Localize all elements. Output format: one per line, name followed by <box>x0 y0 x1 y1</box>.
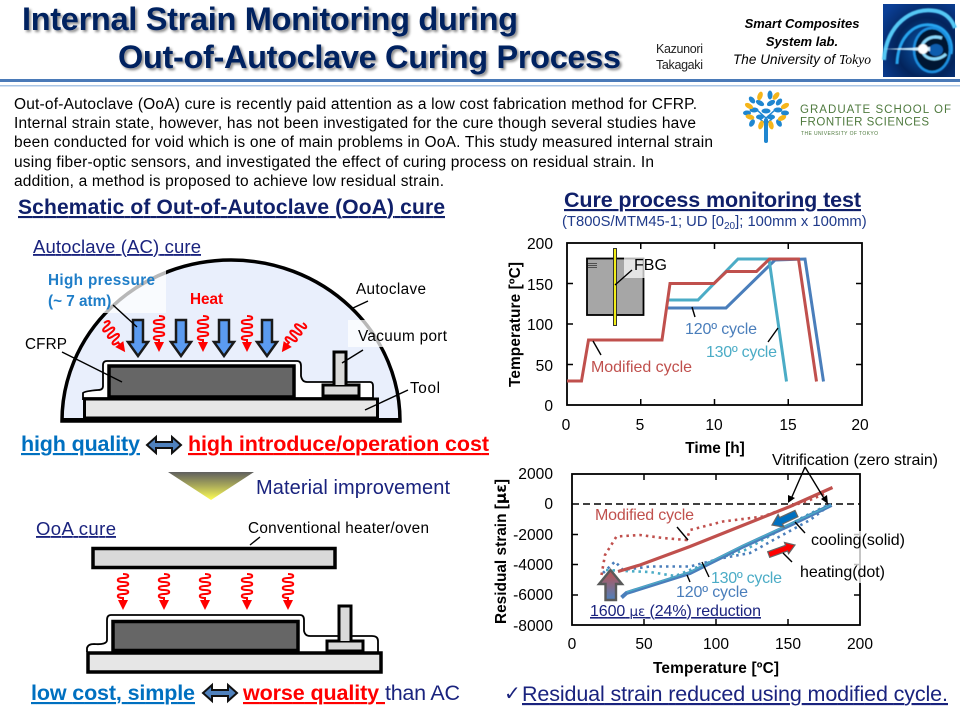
intro text <box>14 96 713 190</box>
lab name <box>733 16 871 67</box>
vacuum bag <box>87 615 378 652</box>
tick labels: 0 <box>544 496 553 513</box>
tick labels <box>527 236 869 434</box>
series labels: Modified cycle <box>591 359 692 376</box>
CFRP laminate <box>113 622 298 650</box>
tick labels: 200 <box>847 636 873 653</box>
heading: cure process monitoring test: ]; 100mm x 100mm) <box>735 214 867 230</box>
comparison: OoA <box>31 681 460 705</box>
chart annotations: 1600 με (24%) reduction <box>590 603 761 620</box>
tick labels: -8000 <box>513 618 553 635</box>
tick labels: 150 <box>527 277 553 294</box>
icon: lab swirl logo <box>883 4 955 77</box>
graduate school name: THE UNIVERSITY OF TOKYO <box>801 131 878 137</box>
tick labels <box>513 466 873 653</box>
author: Kazunori <box>656 42 703 56</box>
chart annotations: Modified cycle <box>595 507 694 524</box>
comparison: OoA: low cost, simple <box>31 681 195 705</box>
graduate school name: FRONTIER SCIENCES <box>800 116 929 128</box>
OoA label: OoA cure <box>36 518 116 539</box>
tick labels: -4000 <box>513 557 553 574</box>
axis titles <box>507 262 745 457</box>
chart annotations <box>590 452 938 620</box>
series: 120 cycle <box>668 259 824 382</box>
series: 130 cycle <box>668 259 786 382</box>
series labels <box>591 321 777 376</box>
icon: graduate school tree logo <box>743 90 790 143</box>
lab name: Smart Composites <box>745 16 859 31</box>
lab name: System lab. <box>766 34 838 49</box>
tick labels: 2000 <box>518 466 553 483</box>
diagram labels <box>25 272 448 397</box>
panel: autoclave cure <box>25 236 457 422</box>
tick labels: 0 <box>544 398 553 415</box>
axes <box>567 243 862 405</box>
tick labels: 5 <box>636 417 645 434</box>
chart annotations: 130º cycle <box>711 570 782 587</box>
panel: OoA cure <box>36 518 429 672</box>
vacuum port <box>327 606 363 651</box>
heading: cure process monitoring test: (T800S/MTM45-1; UD [0 <box>562 214 724 230</box>
tick labels: -6000 <box>513 587 553 604</box>
graduate school name <box>800 104 951 137</box>
heater <box>93 520 429 568</box>
diagram labels: Autoclave <box>356 281 426 298</box>
tick labels: 20 <box>851 417 869 434</box>
comparison: autoclave <box>21 432 489 456</box>
diagram labels: CFRP <box>25 336 67 353</box>
axes <box>572 474 860 625</box>
header rules <box>0 79 960 86</box>
arrow: heating <box>767 539 797 560</box>
autoclave dome <box>62 260 400 421</box>
author <box>656 42 703 72</box>
leader lines <box>62 301 408 410</box>
comparison: OoA: than AC <box>385 681 460 705</box>
axis titles: Temperature [ºC] <box>507 262 524 387</box>
tick labels: 10 <box>705 417 723 434</box>
chart: cure temperature cycles <box>507 236 869 457</box>
axis titles: Residual strain [με] <box>492 479 510 624</box>
title <box>22 1 621 75</box>
axis titles: Time [h] <box>685 440 745 457</box>
diagram labels: Vacuum port <box>358 328 448 345</box>
comparison: autoclave: high quality <box>21 432 140 456</box>
inset: FBG specimen <box>587 248 675 326</box>
diagram labels: Tool <box>410 380 440 397</box>
diagram labels: High pressure <box>48 272 155 289</box>
series: modified cycle <box>567 259 816 382</box>
tool plate <box>88 653 381 672</box>
diagram labels: (~ 7 atm) <box>48 293 111 310</box>
dotted heating curves <box>602 493 830 576</box>
arrow: cooling <box>769 507 799 531</box>
heater: Conventional heater/oven <box>248 520 429 537</box>
label background: cooling and heating <box>838 531 906 583</box>
chart annotations: heating(dot) <box>800 564 885 581</box>
series leaders <box>593 307 778 355</box>
arrows: vitrification <box>788 467 828 504</box>
title: Internal Strain Monitoring during <box>22 1 518 37</box>
graduate school name: GRADUATE SCHOOL OF <box>800 104 951 116</box>
tool plate <box>62 399 400 422</box>
arrow: material improvement <box>168 472 450 500</box>
diagram labels: Heat <box>190 291 223 308</box>
intro text: using fiber-optic sensors, and investigated the effect of curing process on residual strain. In <box>14 154 654 171</box>
title: Out-of-Autoclave Curing Process <box>118 39 621 75</box>
pressure arrows <box>128 320 277 356</box>
tick labels: 15 <box>779 417 797 434</box>
intro text: Internal strain state, however, has not been investigated for the cure though several studies have <box>14 115 696 132</box>
tick labels: -2000 <box>513 527 553 544</box>
tick labels: 200 <box>527 236 553 253</box>
heading: cure process monitoring test: 20 <box>724 221 736 232</box>
series labels: 120º cycle <box>685 321 757 338</box>
inset: FBG specimen: FBG <box>634 257 667 274</box>
arrow: reduction <box>599 570 622 600</box>
axis titles: Temperature [ºC] <box>653 660 779 677</box>
tick labels: 150 <box>775 636 801 653</box>
chart annotations: cooling(solid) <box>811 532 905 549</box>
tick labels: 0 <box>568 636 577 653</box>
intro text: Out-of-Autoclave (OoA) cure is recently paid attention as a low cost fabrication method for CFRP. <box>14 96 697 113</box>
autoclave label: Autoclave (AC) cure <box>33 236 201 257</box>
heading: schematic: Schematic of Out-of-Autoclave (OoA) cure <box>18 196 445 219</box>
vacuum port <box>323 352 359 396</box>
comparison: autoclave: high introduce/operation cost <box>188 432 489 456</box>
arrow: material improvement: Material improvement <box>256 477 450 499</box>
annotation leaders <box>677 522 805 582</box>
heading: cure process monitoring test: Cure process monitoring test <box>564 188 861 212</box>
heading: cure process monitoring test <box>562 188 867 232</box>
tick labels: 0 <box>562 417 571 434</box>
tick labels: 100 <box>527 317 553 334</box>
chart annotations: 120º cycle <box>676 584 748 601</box>
intro text: been conducted for void which is one of main problems in OoA. This study measured internal strain <box>14 134 713 151</box>
chart annotations: Vitrification (zero strain) <box>772 452 938 469</box>
tick labels: 50 <box>536 358 553 375</box>
chart: residual strain vs temperature <box>492 452 938 677</box>
heat arrows <box>118 574 293 610</box>
author: Takagaki <box>656 58 703 72</box>
CFRP laminate <box>109 366 294 397</box>
conclusion: ✓ <box>504 681 521 705</box>
conclusion: Residual strain reduced using modified cycle. <box>522 682 948 706</box>
series labels: 130º cycle <box>706 344 777 361</box>
comparison: OoA: worse quality <box>242 681 385 705</box>
axis titles <box>492 479 779 677</box>
solid cooling curves <box>618 488 832 598</box>
label backgrounds <box>38 264 457 347</box>
tick labels: 50 <box>635 636 653 653</box>
heat arrows <box>100 316 307 355</box>
vacuum bag <box>83 361 373 400</box>
lab name: The University of Tokyo <box>733 52 871 67</box>
tick labels: 100 <box>703 636 729 653</box>
intro text: addition, a method is proposed to achieve low residual strain. <box>14 173 444 190</box>
